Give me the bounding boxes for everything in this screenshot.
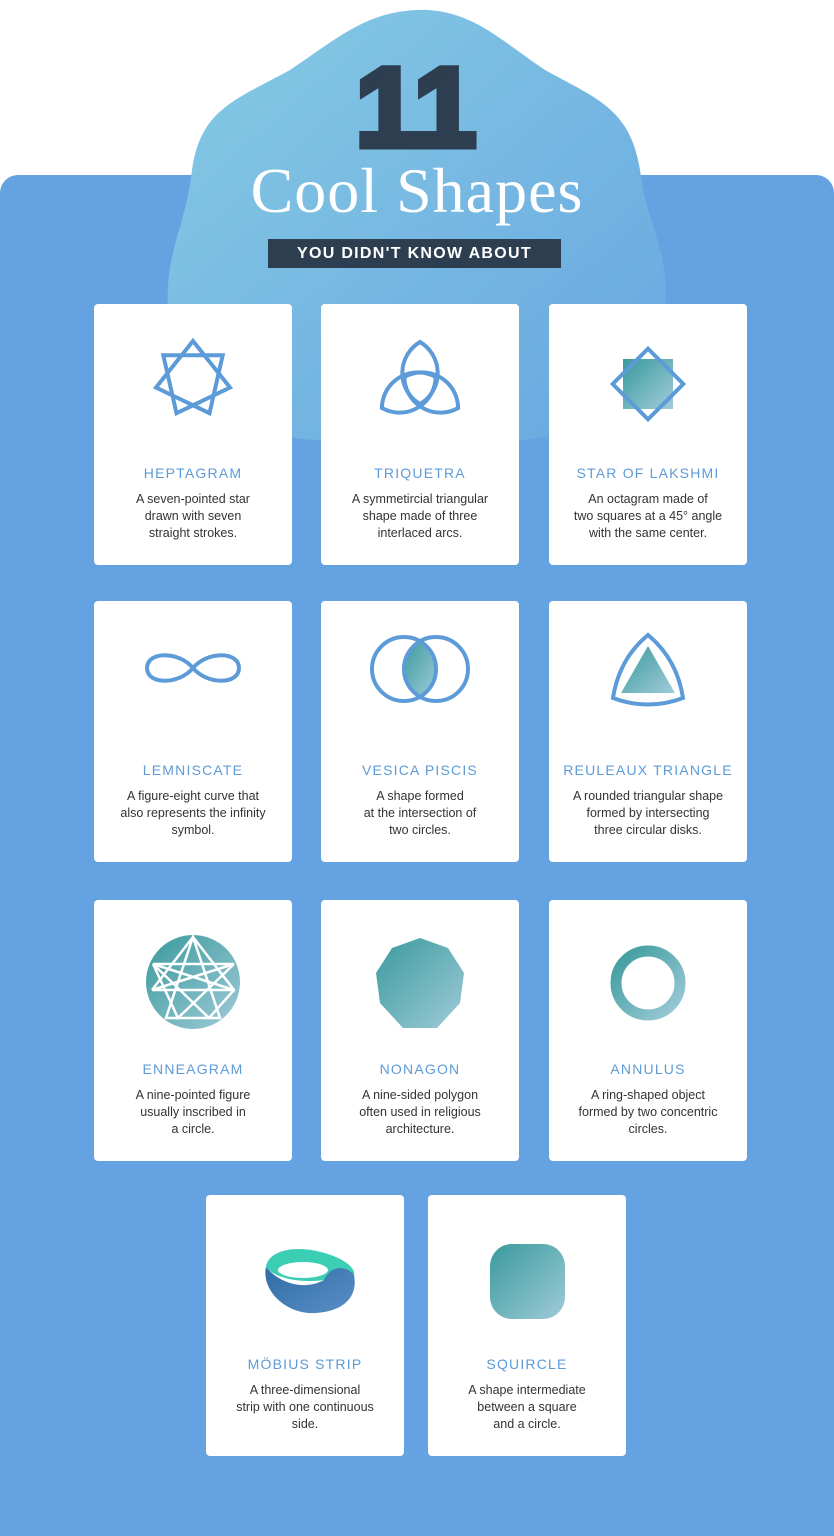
card: triquetra: TRIQUETRA bbox=[374, 465, 466, 481]
card: reuleaux: REULEAUX TRIANGLE bbox=[563, 762, 733, 778]
card: vesica piscis: two circles. bbox=[389, 823, 451, 837]
title: 11 bbox=[356, 45, 478, 170]
card: reuleaux: formed by intersecting bbox=[586, 806, 709, 820]
card: star of lakshmi: An octagram made of bbox=[588, 492, 708, 506]
title bbox=[251, 45, 583, 226]
card: mobius: A three-dimensional bbox=[250, 1383, 360, 1397]
header blob bbox=[168, 10, 666, 440]
card: triquetra: A symmetircial triangular bbox=[352, 492, 488, 506]
subtitle badge bbox=[268, 239, 561, 268]
card: star of lakshmi: two squares at a 45° angle bbox=[574, 509, 722, 523]
card: triquetra: interlaced arcs. bbox=[378, 526, 462, 540]
card: squircle: and a circle. bbox=[493, 1417, 561, 1431]
card: reuleaux: A rounded triangular shape bbox=[573, 789, 723, 803]
title: Cool Shapes bbox=[251, 155, 583, 226]
card: vesica piscis: A shape formed bbox=[376, 789, 464, 803]
card: squircle bbox=[428, 1195, 626, 1456]
card: heptagram: straight strokes. bbox=[149, 526, 237, 540]
card: vesica piscis bbox=[321, 601, 519, 862]
card: mobius: strip with one continuous bbox=[236, 1400, 374, 1414]
card: squircle: A shape intermediate bbox=[468, 1383, 586, 1397]
card: mobius: side. bbox=[292, 1417, 318, 1431]
card: reuleaux: three circular disks. bbox=[594, 823, 702, 837]
card: nonagon: often used in religious bbox=[359, 1105, 481, 1119]
subtitle badge: YOU DIDN'T KNOW ABOUT bbox=[297, 245, 532, 262]
card: enneagram: A nine-pointed figure bbox=[136, 1088, 250, 1102]
card: annulus bbox=[549, 900, 747, 1161]
card: star of lakshmi: STAR OF LAKSHMI bbox=[576, 465, 719, 481]
card: vesica piscis: at the intersection of bbox=[364, 806, 476, 820]
card: nonagon: NONAGON bbox=[380, 1061, 460, 1077]
card: lemniscate: A figure-eight curve that bbox=[127, 789, 259, 803]
card: star of lakshmi: with the same center. bbox=[589, 526, 707, 540]
card: squircle: SQUIRCLE bbox=[486, 1356, 568, 1372]
card: nonagon: A nine-sided polygon bbox=[362, 1088, 478, 1102]
card: heptagram bbox=[94, 304, 292, 565]
card: lemniscate: symbol. bbox=[171, 823, 215, 837]
card: lemniscate: also represents the infinity bbox=[120, 806, 266, 820]
card: mobius: MÖBIUS STRIP bbox=[248, 1356, 362, 1372]
card: heptagram: drawn with seven bbox=[145, 509, 241, 523]
card: enneagram: ENNEAGRAM bbox=[142, 1061, 244, 1077]
card: nonagon: architecture. bbox=[386, 1122, 454, 1136]
card: lemniscate: LEMNISCATE bbox=[143, 762, 243, 778]
card: heptagram: HEPTAGRAM bbox=[144, 465, 242, 481]
card: lemniscate bbox=[94, 601, 292, 862]
card: mobius bbox=[206, 1195, 404, 1456]
card: annulus: circles. bbox=[629, 1122, 667, 1136]
card: heptagram: A seven-pointed star bbox=[136, 492, 250, 506]
card: enneagram bbox=[94, 900, 292, 1161]
card: nonagon bbox=[321, 900, 519, 1161]
card: enneagram: a circle. bbox=[171, 1122, 215, 1136]
card: squircle: between a square bbox=[477, 1400, 577, 1414]
card: annulus: ANNULUS bbox=[610, 1061, 686, 1077]
card: triquetra bbox=[321, 304, 519, 565]
card: triquetra: shape made of three bbox=[363, 509, 477, 523]
card: reuleaux bbox=[549, 601, 747, 862]
card: annulus: A ring-shaped object bbox=[591, 1088, 705, 1102]
card: enneagram: usually inscribed in bbox=[140, 1105, 246, 1119]
card: star of lakshmi bbox=[549, 304, 747, 565]
card: annulus: formed by two concentric bbox=[579, 1105, 717, 1119]
card: vesica piscis: VESICA PISCIS bbox=[362, 762, 478, 778]
